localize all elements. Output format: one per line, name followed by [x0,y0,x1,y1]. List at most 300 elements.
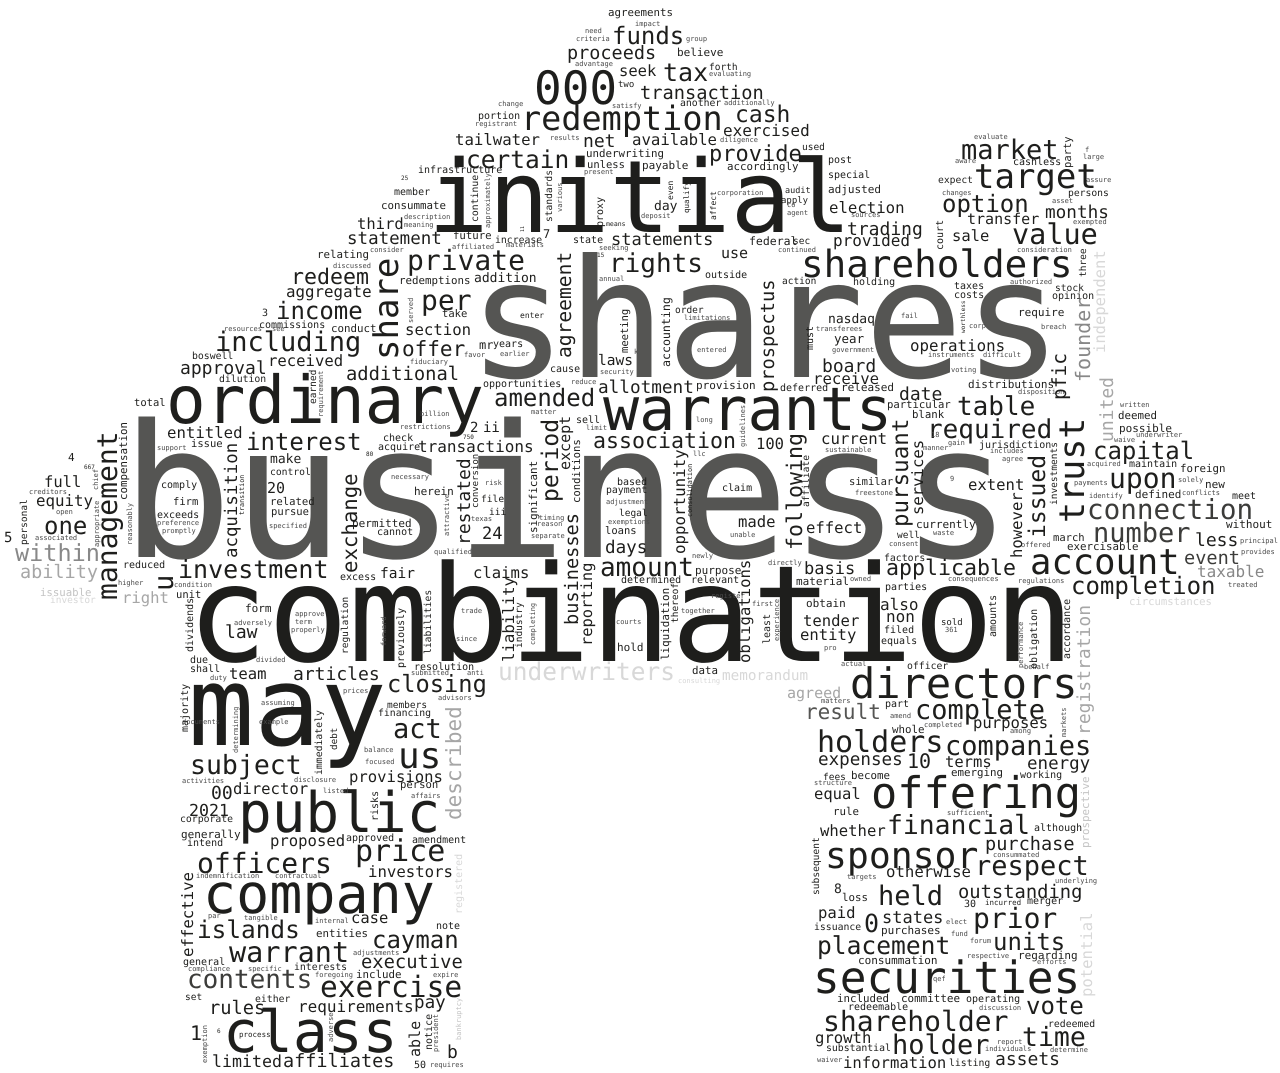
small horizontal words: 3 [262,308,268,319]
small horizontal words: purchases [881,924,941,937]
small horizontal words: become [851,769,890,782]
small horizontal words: corp [969,322,986,330]
small horizontal words: order [675,305,704,316]
small horizontal words: purpose [695,564,741,577]
small horizontal words: statements [611,230,713,250]
small horizontal words: made [738,513,776,531]
small horizontal words: par [208,912,221,920]
large and medium horizontal words: provide [709,142,802,167]
small horizontal words: provides [1241,548,1275,556]
large and medium horizontal words: market [961,135,1059,166]
small horizontal words: individuals [985,1045,1031,1053]
small horizontal words: entered [697,346,727,354]
vertical words: reporting [578,563,596,646]
small horizontal words: action [782,276,816,287]
small horizontal words: approve [295,610,325,618]
small horizontal words: owned [850,575,871,583]
large and medium horizontal words: tax [663,58,708,87]
small horizontal words: paid [818,904,856,922]
small horizontal words: cause [550,364,580,375]
small horizontal words: meet [1232,491,1256,502]
small horizontal words: divided [256,656,286,664]
vertical words: exchange [338,473,362,573]
small horizontal words: 5 [4,530,12,546]
small horizontal words: two [618,80,634,90]
word: ordinary: ordinary [166,362,484,439]
vertical words: 11 [520,226,526,232]
large and medium horizontal words: warrant [229,936,349,969]
small horizontal words: committee [901,992,960,1005]
small horizontal words: loss [842,891,868,904]
small horizontal words: identify [1089,492,1123,500]
small horizontal words: contractual [275,872,321,880]
vertical words: liability [499,577,518,662]
large and medium horizontal words: exercised [723,121,810,140]
small horizontal words: believe [677,46,723,59]
small horizontal words: actual [841,660,866,668]
small horizontal words: full [44,473,81,491]
small horizontal words: proposed [270,832,345,850]
large and medium horizontal words: islands [197,915,300,944]
pale accent words: issuable [40,586,91,599]
small horizontal words: risk [485,479,503,487]
large and medium horizontal words: investment [178,555,329,584]
small horizontal words: anti [467,669,484,677]
small horizontal words: merger [1027,896,1063,907]
small horizontal words: generally [181,828,241,841]
small horizontal words: included [837,992,889,1005]
small horizontal words: 2 [470,420,478,436]
small horizontal words: 6 [217,1028,221,1035]
small horizontal words: fair [380,566,415,582]
word: combination: combination [187,537,1074,693]
small horizontal words: qualified [434,548,472,556]
small horizontal words: dilution [219,374,266,385]
small horizontal words: holding [853,277,895,288]
small horizontal words: b [447,1042,458,1063]
word: warrants: warrants [603,375,892,445]
small horizontal words: manner [923,444,948,452]
small horizontal words: loans [605,525,637,537]
vertical words: consolidation [686,464,694,517]
large and medium horizontal words: target [974,157,1097,197]
small horizontal words: material [796,575,849,588]
small horizontal words: qef [933,975,946,983]
small horizontal words: 667 [84,464,95,471]
small horizontal words: aware [955,157,976,165]
small horizontal words: taxes [954,281,984,292]
small horizontal words: board [822,356,876,377]
small horizontal words: receive [813,369,879,388]
large and medium horizontal words: 0 [864,909,879,938]
small horizontal words: additionally [724,99,775,107]
small horizontal words: persons [1068,188,1109,199]
small horizontal words: related [270,496,315,508]
small horizontal words: disclosure [294,776,336,784]
small horizontal words: transactions [418,437,534,456]
small horizontal words: waste [933,529,954,537]
large and medium horizontal words: applicable [886,556,1016,581]
vertical words: exemption [201,1025,209,1063]
small horizontal words: shall [190,664,220,675]
large and medium horizontal words: securities [813,953,1080,1004]
small horizontal words: use [721,244,748,262]
small horizontal words: laws [598,353,633,369]
small horizontal words: seek [619,62,657,80]
small horizontal words: promptly [162,527,196,535]
small horizontal words: file [481,494,504,505]
small horizontal words: annual [599,275,624,283]
small horizontal words: years [493,339,523,350]
large and medium horizontal words: act [393,714,442,745]
large and medium horizontal words: companies [945,731,1091,762]
pale accent words: result [805,700,881,724]
vertical words: obligations [736,560,754,663]
small horizontal words: since [456,635,477,643]
small horizontal words: herein [414,485,454,498]
small horizontal words: rule [833,805,859,818]
small horizontal words: matters [821,697,851,705]
small horizontal words: texas [471,515,492,523]
small horizontal words: substantial [826,1043,891,1054]
small horizontal words: acquired [1087,460,1121,468]
small horizontal words: less [1195,530,1238,551]
large and medium horizontal words: units [993,928,1065,956]
small horizontal words: approved [346,833,394,844]
small horizontal words: 15 [597,252,605,259]
large and medium horizontal words: class [223,998,398,1066]
vertical words: obligation [1029,609,1040,669]
small horizontal words: audit [785,186,811,196]
small horizontal words: associated [35,534,77,542]
word: initial: initial [428,139,852,256]
small horizontal words: separate [531,532,565,540]
small horizontal words: make [270,452,301,467]
small horizontal words: apply [781,196,809,206]
large and medium horizontal words: offer [402,337,465,361]
vertical words: requirement [317,371,325,417]
small horizontal words: enter [520,311,544,320]
small horizontal words: prices [343,687,368,695]
large and medium horizontal words: table [957,392,1035,422]
small horizontal words: efforts [1037,958,1067,966]
small horizontal words: interests [294,962,347,973]
large and medium horizontal words: price [355,834,445,869]
small horizontal words: state [573,235,603,246]
vertical words: completing [529,603,537,645]
small horizontal words: march [1053,532,1085,544]
small horizontal words: reason [537,520,562,528]
small horizontal words: particular [887,399,951,411]
vertical words: issued [1025,455,1051,538]
vertical words: accordance [1062,599,1073,659]
large and medium horizontal words: holders [817,725,943,760]
small horizontal words: agree [1002,455,1023,463]
large and medium horizontal words: sponsor [825,834,978,877]
small horizontal words: net [583,131,616,152]
small horizontal words: 7 [543,227,550,241]
large and medium horizontal words: private [407,244,525,277]
small horizontal words: case [351,909,388,927]
small horizontal words: payable [642,159,688,172]
small horizontal words: satisfy [612,102,642,110]
vertical words: restated [454,458,475,545]
small horizontal words: nasdaq [828,312,875,327]
vertical words: compensation [117,422,130,500]
vertical words: affect [709,191,718,220]
vertical words: however [1008,492,1026,558]
vertical words: described [442,706,466,820]
small horizontal words: advisors [438,694,472,702]
vertical words: agreement [553,252,576,358]
small horizontal words: underwriting [586,147,664,160]
large and medium horizontal words: proceeds [567,43,656,64]
small horizontal words: used [802,142,825,153]
small horizontal words: diligence [720,136,758,144]
small horizontal words: present [584,168,614,176]
small horizontal words: voting [951,366,976,374]
small horizontal words: redemptions [399,274,471,287]
small horizontal words: requirements [298,997,414,1016]
small horizontal words: forum [970,937,991,945]
small horizontal words: affairs [411,792,441,800]
small horizontal words: control [270,467,311,478]
small horizontal words: costs [954,290,984,301]
small horizontal words: received [268,352,343,370]
small horizontal words: offered [1021,541,1051,549]
small horizontal words: consider [370,246,404,254]
vertical words: standards [544,170,555,222]
vertical words: effective [178,872,197,957]
large and medium horizontal words: public [238,781,440,846]
small horizontal words: released [841,381,894,394]
large and medium horizontal words: time [1022,1022,1086,1053]
small horizontal words: changes [942,189,972,197]
small horizontal words: intend [187,838,223,849]
small horizontal words: security [600,368,634,376]
small horizontal words: current [821,429,887,448]
small horizontal words: limited [212,1052,282,1071]
small horizontal words: energy [1027,754,1090,774]
small horizontal words: articles [293,664,380,685]
small horizontal words: government [832,346,874,354]
small horizontal words: consideration [1017,246,1072,254]
small horizontal words: restrictions [400,423,451,431]
vertical words: u [149,575,180,591]
small horizontal words: determined [621,575,681,586]
small horizontal words: months [1045,203,1109,223]
small horizontal words: operations [910,336,1005,355]
small horizontal words: foreign [1180,462,1226,475]
small horizontal words: registrant [475,120,517,128]
small horizontal words: payments [1074,479,1108,487]
small horizontal words: operating [966,994,1020,1005]
vertical words: majority [180,684,191,732]
small horizontal words: check [383,433,413,444]
small horizontal words: timing [539,514,564,522]
small horizontal words: specific [248,965,282,973]
small horizontal words: payment [606,485,647,496]
small horizontal words: legal [619,508,648,519]
pale accent words: investor [50,595,96,606]
vertical words: qualify [682,181,691,213]
vertical words: appropriate [93,501,101,547]
small horizontal words: among [1010,727,1031,735]
large and medium horizontal words: redeem [291,265,369,290]
small horizontal words: person [400,779,438,791]
small horizontal words: targets [847,873,877,881]
small horizontal words: future [453,229,492,242]
small horizontal words: together [681,607,715,615]
small horizontal words: assuming [261,699,295,707]
small horizontal words: total [134,397,166,409]
pale accent words: within [15,539,100,567]
small horizontal words: means [606,220,626,228]
small horizontal words: stock [1055,283,1084,294]
small horizontal words: exercisable [1067,540,1139,553]
large and medium horizontal words: option [942,190,1029,218]
small horizontal words: courts [616,618,641,626]
small horizontal words: members [387,700,427,711]
pale accent words: taxable [1197,562,1264,581]
vertical words: registered [454,854,465,914]
small horizontal words: entitled [167,423,243,442]
small horizontal words: similar [849,476,893,488]
small horizontal words: election [829,198,905,217]
small horizontal words: evaluating [709,70,751,78]
small horizontal words: obtain [806,597,846,610]
small horizontal words: earlier [500,350,530,358]
small horizontal words: example [259,718,289,726]
small horizontal words: affiliated [452,243,494,251]
small horizontal words: excess [340,572,376,583]
small horizontal words: higher [118,579,143,587]
vertical words: investments [1049,442,1060,505]
small horizontal words: commissions [259,320,325,331]
small horizontal words: limit [586,424,607,432]
small horizontal words: adversely [234,619,272,627]
small horizontal words: adjusted [828,183,881,196]
vertical words: risks [370,791,381,821]
small horizontal words: financing [378,708,431,719]
small horizontal words: increase [495,235,542,246]
small horizontal words: issuance [814,922,861,933]
small horizontal words: equal [814,785,861,803]
vertical words: united [1097,377,1118,442]
small horizontal words: long [696,416,713,424]
small horizontal words: team [229,665,267,683]
small horizontal words: iii [489,507,506,518]
small horizontal words: transfer [967,210,1039,228]
small horizontal words: agent [787,209,808,217]
small horizontal words: requires [430,1061,464,1069]
small horizontal words: sale [952,227,989,245]
small horizontal words: consummate [381,199,446,212]
small horizontal words: tailwater [455,130,540,149]
small horizontal words: disposition [1018,388,1064,396]
large and medium horizontal words: amount [600,553,694,583]
small horizontal words: set [185,992,202,1003]
small horizontal words: fund [951,930,968,938]
word: business: business [121,385,1012,601]
small horizontal words: evaluate [974,133,1008,141]
small horizontal words: advantage [575,60,613,68]
small horizontal words: duty [210,674,227,682]
small horizontal words: director [233,780,308,798]
small horizontal words: trade [461,607,482,615]
small horizontal words: 100 [756,435,784,453]
small horizontal words: day [654,199,678,214]
small horizontal words: agreements [608,6,673,19]
small horizontal words: federal [749,234,797,248]
small horizontal words: new [1205,478,1225,491]
small horizontal words: data [692,664,718,677]
small horizontal words: asset [1052,197,1073,205]
small horizontal words: without [1226,518,1272,531]
vertical words: worthless [960,300,967,333]
small horizontal words: deposit [641,212,671,220]
small horizontal words: jurisdiction [979,440,1051,451]
small horizontal words: cannot [377,527,413,538]
small horizontal words: 24 [482,524,502,544]
small horizontal words: behalf [1024,663,1049,671]
small horizontal words: otherwise [886,862,971,881]
small horizontal words: law [225,622,258,643]
small horizontal words: discussed [333,262,371,270]
small horizontal words: deferred [780,383,828,394]
small horizontal words: favor [464,351,485,359]
small horizontal words: support [157,444,187,452]
small horizontal words: matter [531,408,556,416]
small horizontal words: corporate [180,814,233,825]
small horizontal words: pay [414,993,446,1013]
vertical words: services [909,440,927,515]
small horizontal words: permitted [352,517,412,530]
small horizontal words: meaning [404,221,434,229]
small horizontal words: post [828,155,852,166]
large and medium horizontal words: shareholder [823,1005,1008,1038]
small horizontal words: completed [924,721,962,729]
small horizontal words: opinion [1052,291,1094,302]
small horizontal words: newly [692,552,713,560]
small horizontal words: criteria [576,35,610,43]
small horizontal words: whether [820,822,886,840]
small horizontal words: addition [474,271,537,286]
vertical words: accounting [659,297,673,367]
vertical words: proxy [595,197,606,227]
small horizontal words: extent [968,476,1024,494]
large and medium horizontal words: officers [197,847,332,880]
small horizontal words: either [255,994,290,1005]
vertical words: notice [424,1014,435,1050]
large and medium horizontal words: subject [190,750,302,781]
small horizontal words: elect [946,918,967,926]
small horizontal words: tender [803,612,859,630]
large and medium horizontal words: including [215,327,361,358]
large and medium horizontal words: amended [494,384,595,412]
vertical words: pursuant [888,419,914,527]
large and medium horizontal words: financial [887,810,1030,841]
small horizontal words: equals [881,636,917,647]
large and medium horizontal words: capital [1093,437,1194,465]
small horizontal words: acquire [378,442,420,453]
small horizontal words: listing [949,1058,990,1069]
small horizontal words: 4 [68,451,75,464]
small horizontal words: consummation [858,954,937,967]
small horizontal words: officer [907,661,948,672]
small horizontal words: first [752,600,773,608]
vertical words: liabilities [423,590,434,654]
